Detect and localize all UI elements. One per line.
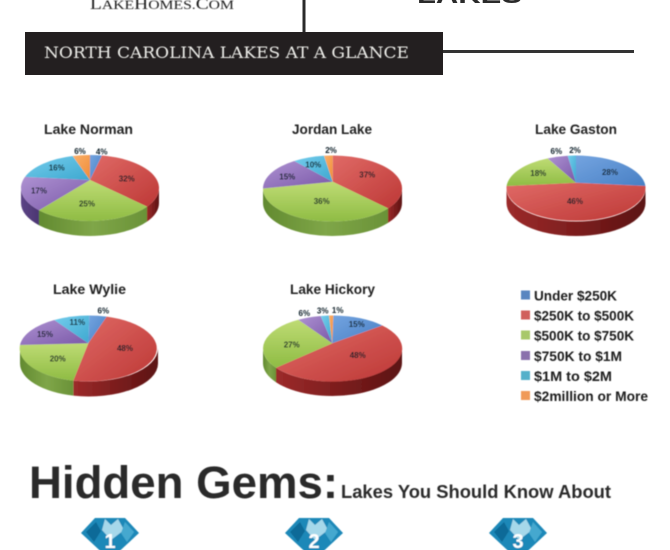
- heading: Hidden Gems: Hidden Gems:: [29, 457, 338, 508]
- pie chart: Lake Norman: 17%: [31, 186, 47, 196]
- legend: $250K to $500K: [534, 308, 634, 324]
- pie chart: Lake Wylie: Lake Wylie: [53, 281, 126, 297]
- pie chart: Lake Norman: 6%: [74, 147, 86, 156]
- pie chart: Lake Gaston: 2%: [569, 146, 581, 155]
- pie chart: Lake Norman: 25%: [79, 200, 95, 208]
- pie chart: Lake Hickory: 15%: [349, 320, 365, 329]
- pie chart: Lake Hickory: 6%: [299, 309, 310, 318]
- pie chart: Lake Wylie: [20, 281, 158, 396]
- pie chart: Lake Norman: Lake Norman: [44, 121, 133, 137]
- pie chart: Jordan Lake: 2%: [325, 146, 337, 155]
- vertical connector: [302, 0, 306, 33]
- legend: $2million or More: [534, 389, 648, 404]
- pie chart: Lake Hickory: 3%: [317, 306, 328, 316]
- pie chart: Lake Gaston: 6%: [551, 147, 562, 156]
- pie chart: Jordan Lake: 36%: [314, 197, 330, 206]
- legend: $1M to $2M: [534, 369, 612, 384]
- icon: diamond 3: [489, 518, 547, 550]
- pie chart: Lake Gaston: 46%: [567, 197, 583, 206]
- icon: diamond 2: [285, 518, 343, 550]
- section banner: [25, 32, 443, 75]
- pie chart: Jordan Lake: 15%: [279, 172, 295, 182]
- pie chart: Lake Wylie: 48%: [117, 344, 133, 353]
- pie chart: Lake Wylie: 15%: [37, 330, 53, 339]
- pie chart: Lake Norman: 32%: [119, 174, 135, 184]
- pie chart: Lake Hickory: [263, 281, 402, 396]
- legend: [521, 288, 648, 404]
- pie chart: Lake Gaston: Lake Gaston: [535, 121, 617, 137]
- heading: Hidden Gems: [29, 457, 611, 508]
- pie chart: Lake Wylie: 20%: [50, 354, 66, 364]
- legend: $500K to $750K: [534, 328, 634, 344]
- pie chart: Lake Gaston: 28%: [602, 168, 618, 177]
- pie chart: Lake Hickory: 48%: [350, 351, 366, 360]
- pie chart: Lake Hickory: 27%: [284, 340, 300, 350]
- pie chart: Jordan Lake: 37%: [359, 170, 375, 180]
- pie chart: Jordan Lake: [263, 121, 402, 236]
- icon: diamond 1: [81, 518, 139, 550]
- pie chart: Jordan Lake: Jordan Lake: [292, 121, 372, 137]
- subheading: Lakes You Should Know About: [341, 482, 611, 502]
- horizontal connector: [443, 50, 634, 53]
- pie chart: Lake Gaston: [506, 121, 646, 236]
- pie chart: Lake Hickory: 1%: [332, 306, 343, 315]
- pie chart: Lake Wylie: 6%: [98, 306, 109, 316]
- banner title: NORTH CAROLINA LAKES AT A GLANCE: [44, 43, 409, 62]
- legend: Under $250K: [534, 288, 617, 304]
- pie chart: Lake Norman: [21, 121, 159, 236]
- legend: $750K to $1M: [534, 349, 622, 364]
- pie chart: Lake Norman: 4%: [96, 148, 107, 156]
- pie chart: Lake Wylie: 11%: [70, 318, 85, 327]
- pie chart: Jordan Lake: 10%: [305, 160, 321, 170]
- pie chart: Lake Norman: 16%: [49, 164, 65, 172]
- pie chart: Lake Hickory: Lake Hickory: [290, 281, 375, 297]
- pie chart: Lake Gaston: 18%: [530, 169, 546, 178]
